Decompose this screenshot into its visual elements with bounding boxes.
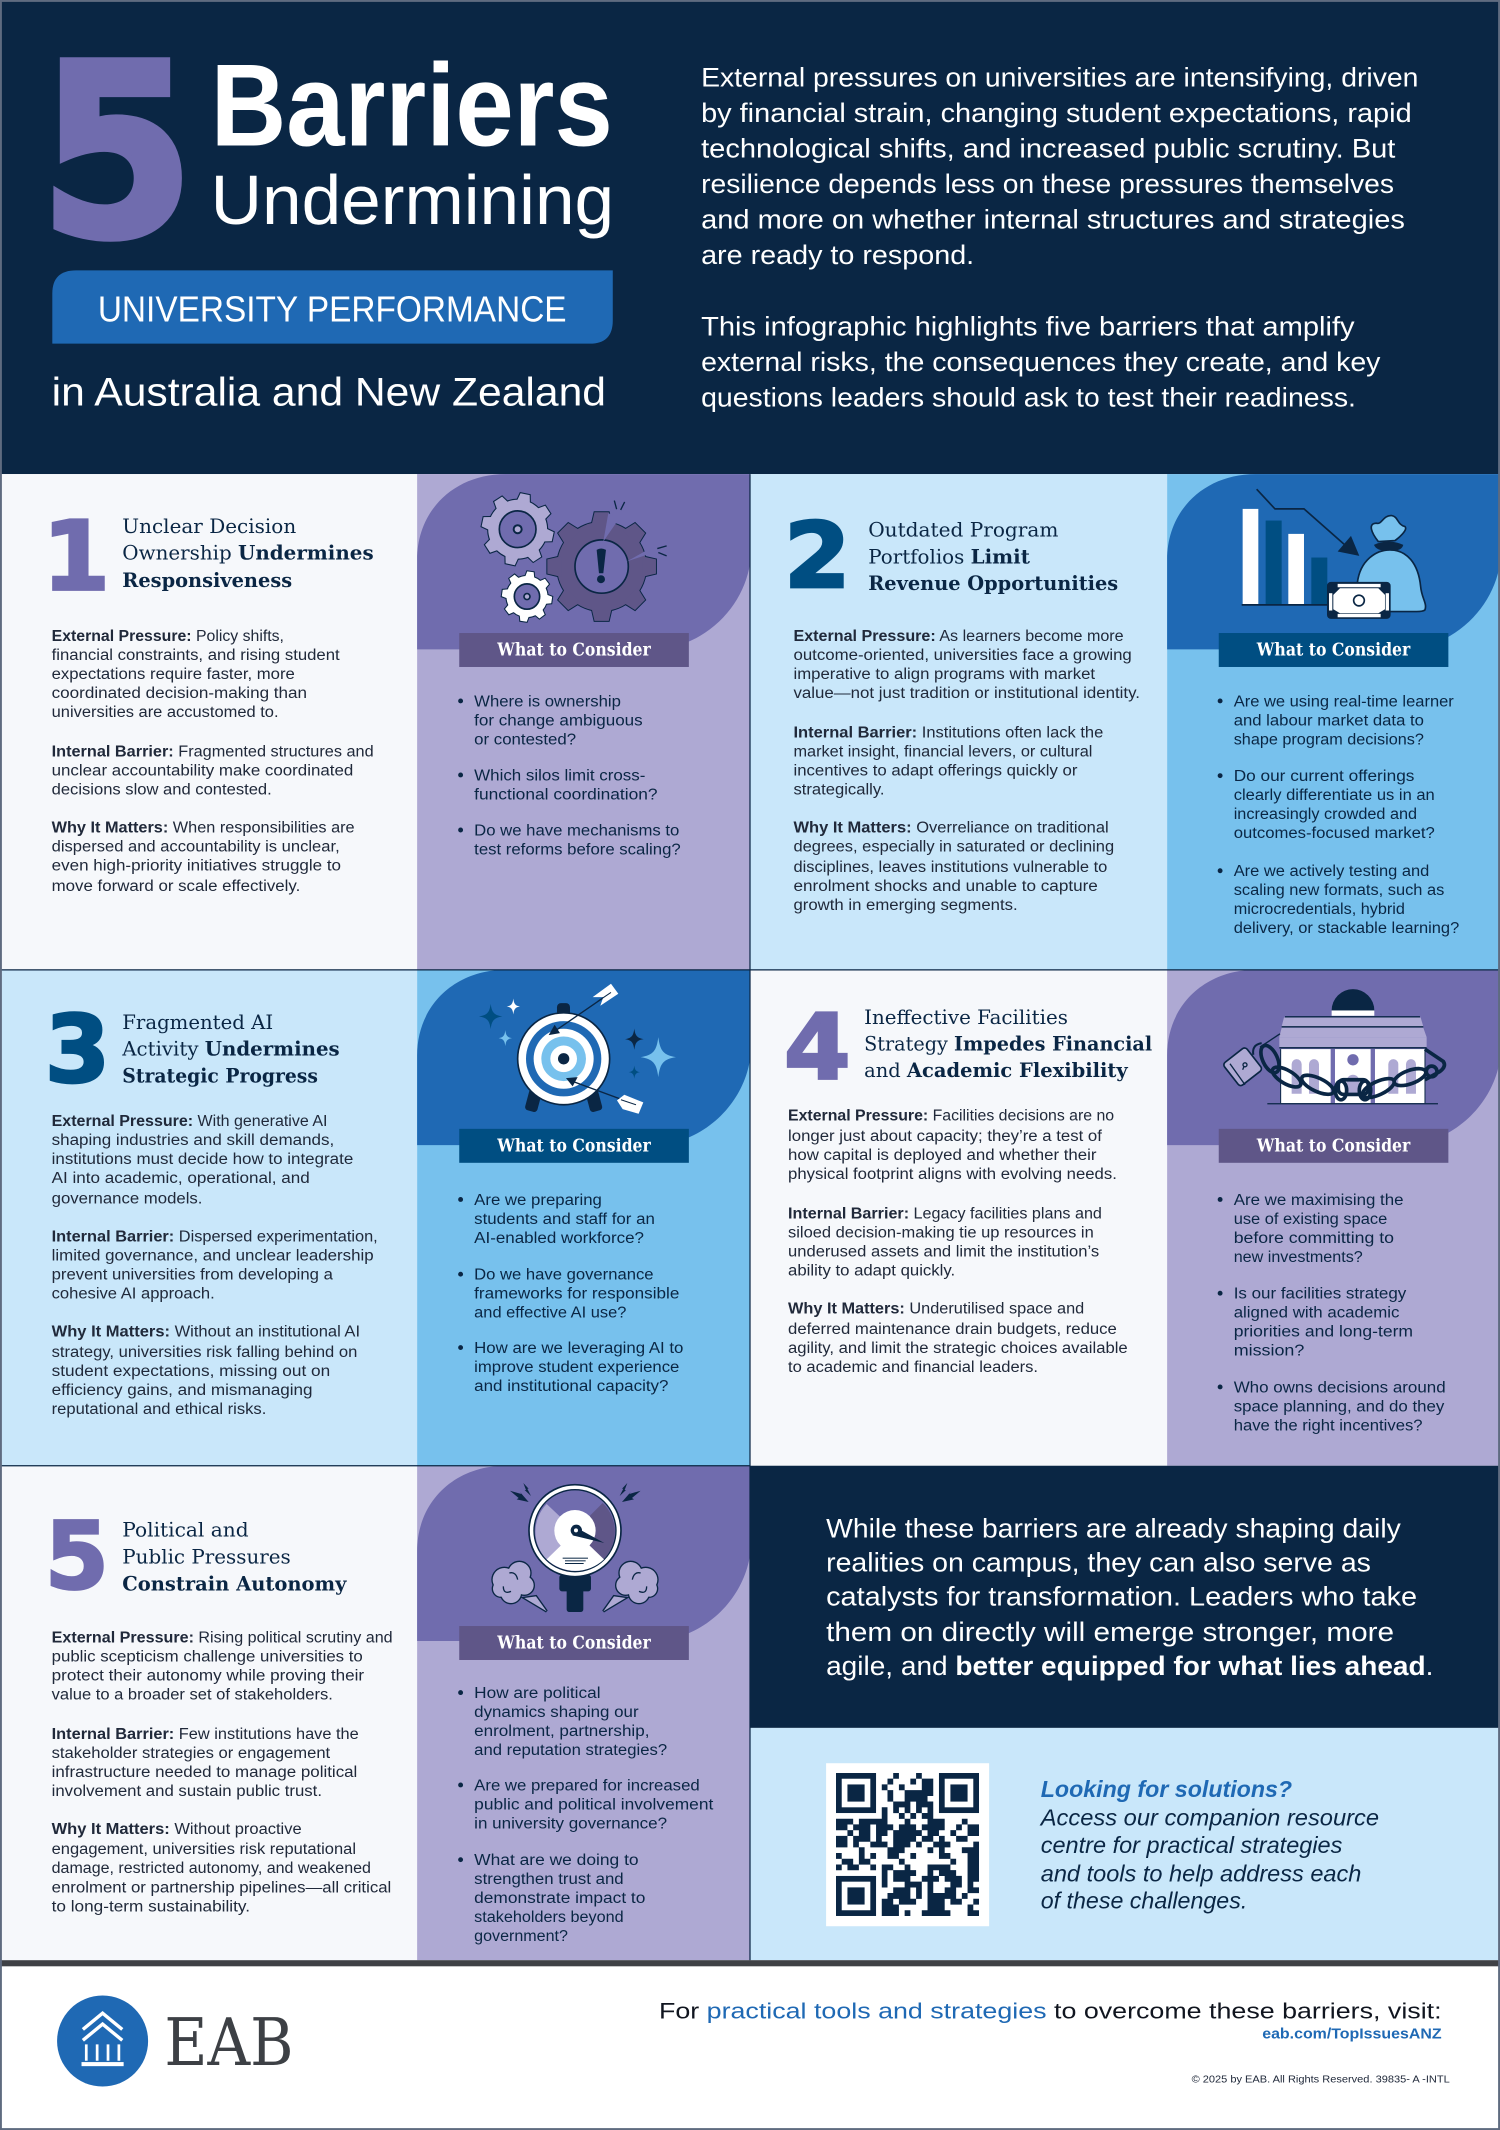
title: Undermining: Undermining — [211, 161, 614, 239]
icon: target with arrows — [479, 984, 676, 1114]
banner: university performance — [52, 270, 613, 344]
body text 5: External Pressure: Rising political scrutiny and — [52, 1628, 393, 1646]
heading 4: Ineffective Facilities — [864, 1006, 1068, 1029]
body text 4: longer just about capacity; they’re a test of — [788, 1127, 1102, 1145]
questions 5: dynamics shaping our — [474, 1703, 639, 1721]
questions 2 — [1218, 692, 1459, 937]
body text 3: cohesive AI approach. — [52, 1285, 215, 1303]
body text 3: Why It Matters: Without an institutional AI — [52, 1323, 360, 1341]
questions 4: before committing to — [1234, 1229, 1394, 1247]
big numeral 5: 5 — [39, 14, 194, 292]
heading 4: Strategy Impedes Financial — [864, 1033, 1152, 1056]
body text 1 — [52, 627, 374, 895]
body text 4: siloed decision-making tie up resources in — [788, 1224, 1094, 1242]
resource text: Access our companion resource — [1039, 1805, 1379, 1831]
intro paragraph: are ready to respond. — [701, 239, 974, 270]
title: Barriers: Barriers — [211, 39, 613, 170]
questions 5: Are we prepared for increased — [474, 1776, 700, 1794]
questions 3: Are we preparing — [474, 1191, 602, 1209]
label: what to consider — [459, 633, 689, 667]
questions 2: shape program decisions? — [1234, 730, 1424, 748]
resource panel — [750, 1728, 1500, 1960]
heading 3: Activity Undermines — [121, 1037, 340, 1060]
questions 4: Is our facilities strategy — [1234, 1285, 1406, 1303]
questions 2: microcredentials, hybrid — [1234, 900, 1405, 918]
label: what to consider: What to Consider — [496, 1135, 651, 1156]
questions 3: frameworks for responsible — [474, 1285, 679, 1303]
body text 5: to long-term sustainability. — [52, 1897, 250, 1915]
body text 2: disciplines, leaves institutions vulnerable to — [793, 858, 1107, 876]
questions 5: and reputation strategies? — [474, 1741, 667, 1759]
questions 3: AI-enabled workforce? — [474, 1229, 644, 1247]
questions 5: How are political — [474, 1684, 601, 1702]
intro paragraph: external risks, the consequences they create, and key — [701, 346, 1381, 377]
numeral 3: 3 — [45, 995, 110, 1103]
body text 5: engagement, universities risk reputational — [52, 1840, 356, 1858]
body text 5: stakeholder strategies or engagement — [52, 1744, 331, 1762]
body text 4: to academic and financial leaders. — [788, 1358, 1038, 1376]
body text 2: outcome-oriented, universities face a growing — [793, 646, 1132, 664]
body text 1: expectations require faster, more — [52, 665, 295, 683]
body text 2: incentives to adapt offerings quickly or — [793, 762, 1078, 780]
questions 5: enrolment, partnership, — [474, 1722, 649, 1740]
heading 3: Strategic Progress — [122, 1065, 318, 1088]
icon: falling bar chart and money bag — [1242, 489, 1426, 619]
body text 1: move forward or scale effectively. — [52, 877, 300, 895]
panel 3: fragmented AI activity — [0, 970, 750, 1466]
heading 2: Portfolios Limit — [868, 546, 1030, 569]
body text 1: External Pressure: Policy shifts, — [52, 627, 284, 645]
label: what to consider — [459, 1129, 689, 1163]
heading 1 — [122, 515, 374, 592]
questions 1: for change ambiguous — [474, 711, 643, 729]
questions 4: priorities and long-term — [1234, 1323, 1413, 1341]
icon: pressure gauge — [493, 1483, 657, 1612]
questions 5: strengthen trust and — [474, 1870, 624, 1888]
body text 1: even high-priority initiatives struggle to — [52, 857, 341, 875]
questions 5: What are we doing to — [474, 1851, 639, 1869]
label: what to consider — [1219, 633, 1448, 667]
numeral 4: 4 — [784, 997, 851, 1101]
questions 4: Are we maximising the — [1234, 1191, 1404, 1209]
body text 1: decisions slow and contested. — [52, 781, 272, 799]
questions 3: and institutional capacity? — [474, 1377, 669, 1395]
body text 4: underused assets and limit the institution’s — [788, 1243, 1099, 1261]
body text 2: imperative to align programs with market — [793, 665, 1096, 683]
logo: EAB — [57, 1996, 293, 2087]
intro paragraph: questions leaders should ask to test their readiness. — [701, 382, 1356, 413]
questions 4: aligned with academic — [1234, 1304, 1399, 1322]
body text 5 — [52, 1628, 393, 1915]
copyright: © 2025 by EAB. All Rights Reserved. 39835- A -INTL — [1192, 2074, 1450, 2085]
body text 1: dispersed and accountability is unclear, — [52, 838, 340, 856]
body text 2: Why It Matters: Overreliance on traditional — [793, 819, 1109, 837]
intro paragraph: technological shifts, and increased public scrutiny. But — [701, 132, 1396, 163]
body text 5: damage, restricted autonomy, and weakened — [52, 1859, 371, 1877]
intro paragraph: resilience depends less on these pressures themselves — [701, 168, 1394, 199]
body text 1: universities are accustomed to. — [52, 703, 279, 721]
body text 3: shaping industries and skill demands, — [52, 1131, 334, 1149]
body text 4: how capital is deployed and whether their — [788, 1146, 1097, 1164]
body text 3: External Pressure: With generative AI — [52, 1112, 327, 1130]
footer call to action: For practical tools and strategies to overcome these barriers, visit: — [659, 1999, 1442, 2024]
numeral 1: 1 — [42, 503, 110, 613]
body text 5: Internal Barrier: Few institutions have the — [52, 1725, 359, 1743]
body text 5: involvement and sustain public trust. — [52, 1782, 322, 1800]
body text 3: student expectations, missing out on — [52, 1362, 330, 1380]
icon: gears with warning — [475, 487, 667, 625]
questions 2: Do our current offerings — [1234, 767, 1414, 785]
body text 3: strategy, universities risk falling behind on — [52, 1343, 357, 1361]
body text 4 — [788, 1107, 1128, 1376]
body text 2: growth in emerging segments. — [793, 896, 1018, 914]
heading 5 — [122, 1518, 347, 1596]
body text 5: value to a broader set of stakeholders. — [52, 1685, 333, 1703]
questions 1: Where is ownership — [474, 692, 621, 710]
body text 2: degrees, especially in saturated or declining — [793, 838, 1114, 856]
questions 5 — [458, 1684, 714, 1945]
questions 2: scaling new formats, such as — [1234, 881, 1444, 899]
body text 1: Internal Barrier: Fragmented structures and — [52, 743, 374, 761]
questions 5: stakeholders beyond — [474, 1908, 624, 1926]
heading 1: Responsiveness — [122, 569, 292, 592]
label: what to consider — [1219, 1129, 1448, 1163]
body text 1: financial constraints, and rising student — [52, 646, 340, 664]
body text 3: institutions must decide how to integrate — [52, 1150, 353, 1168]
resource text: and tools to help address each — [1041, 1860, 1361, 1886]
conclusion panel: catalysts for transformation. Leaders who take — [826, 1581, 1417, 1612]
questions 2: clearly differentiate us in an — [1234, 786, 1435, 804]
resource text: Looking for solutions? — [1041, 1776, 1292, 1802]
panel 2: outdated program portfolios — [750, 474, 1500, 970]
subtitle: in Australia and New Zealand — [52, 370, 606, 414]
heading 4: and Academic Flexibility — [864, 1059, 1129, 1082]
header panel — [0, 0, 1500, 474]
conclusion panel: them on directly will emerge stronger, more — [826, 1616, 1394, 1647]
numeral 2: 2 — [784, 505, 851, 609]
body text 2: value—not just tradition or institutional identity. — [793, 684, 1140, 702]
heading 2 — [868, 519, 1118, 595]
banner: university performance: UNIVERSITY PERFORMANCE — [98, 288, 567, 329]
body text 2: External Pressure: As learners become more — [793, 627, 1124, 645]
questions 1: or contested? — [474, 730, 576, 748]
body text 5: protect their autonomy while proving their — [52, 1666, 365, 1684]
resource text: centre for practical strategies — [1041, 1832, 1343, 1858]
heading 3 — [121, 1011, 340, 1088]
resource text: of these challenges. — [1041, 1888, 1247, 1914]
body text 4: Internal Barrier: Legacy facilities plans and — [788, 1205, 1102, 1223]
body text 3: efficiency gains, and mismanaging — [52, 1381, 312, 1399]
heading 5: Political and — [122, 1518, 249, 1541]
body text 4: agility, and limit the strategic choices available — [788, 1339, 1128, 1357]
questions 1 — [458, 692, 681, 858]
questions 1: Do we have mechanisms to — [474, 821, 679, 839]
heading 1: Ownership Undermines — [122, 542, 374, 565]
footer call to action — [659, 1999, 1442, 2042]
body text 3: governance models. — [52, 1190, 202, 1208]
panel 1: unclear decision ownership — [0, 474, 750, 970]
panel 4: ineffective facilities strategy — [750, 970, 1500, 1466]
questions 4: new investments? — [1234, 1248, 1363, 1266]
questions 2: Are we actively testing and — [1234, 862, 1429, 880]
body text 5: public scepticism challenge universities to — [52, 1647, 363, 1665]
intro paragraph: External pressures on universities are intensifying, driven — [701, 61, 1418, 92]
questions 1: test reforms before scaling? — [474, 840, 681, 858]
questions 5: public and political involvement — [474, 1795, 714, 1813]
body text 1: Why It Matters: When responsibilities are — [52, 819, 355, 837]
questions 3: students and staff for an — [474, 1210, 655, 1228]
panel 5: political and public pressures — [0, 1466, 750, 1960]
body text 2: strategically. — [793, 781, 885, 799]
body text 2: market insight, financial levers, or cultural — [793, 743, 1092, 761]
body text 5: Why It Matters: Without proactive — [52, 1820, 302, 1838]
body text 2: enrolment shocks and unable to capture — [793, 877, 1098, 895]
label: what to consider: What to Consider — [1256, 639, 1411, 660]
questions 2: and labour market data to — [1234, 711, 1424, 729]
body text 3: reputational and ethical risks. — [52, 1400, 266, 1418]
questions 3: and effective AI use? — [474, 1304, 626, 1322]
body text 4: physical footprint aligns with evolving needs. — [788, 1165, 1117, 1183]
body text 3: AI into academic, operational, and — [52, 1169, 310, 1187]
body text 4: ability to adapt quickly. — [788, 1262, 955, 1280]
numeral 5: 5 — [45, 1502, 109, 1610]
questions 3: Do we have governance — [474, 1266, 654, 1284]
conclusion panel — [750, 1466, 1500, 1728]
questions 4: use of existing space — [1234, 1210, 1387, 1228]
questions 4 — [1218, 1191, 1446, 1434]
questions 3: improve student experience — [474, 1358, 679, 1376]
QR code — [826, 1763, 989, 1926]
heading 2: Outdated Program — [868, 519, 1058, 542]
label: what to consider: What to Consider — [496, 639, 651, 660]
questions 4: space planning, and do they — [1234, 1397, 1444, 1415]
heading 5: Constrain Autonomy — [122, 1573, 347, 1596]
questions 4: have the right incentives? — [1234, 1416, 1423, 1434]
label: what to consider: What to Consider — [1256, 1135, 1411, 1156]
questions 1: Which silos limit cross- — [474, 766, 645, 784]
label: what to consider: What to Consider — [496, 1632, 651, 1653]
body text 3 — [52, 1112, 378, 1418]
questions 2: increasingly crowded and — [1234, 805, 1417, 823]
questions 5: government? — [474, 1927, 568, 1945]
conclusion panel: While these barriers are already shaping daily — [826, 1513, 1401, 1544]
body text 4: deferred maintenance drain budgets, reduce — [788, 1320, 1117, 1338]
body text 4: External Pressure: Facilities decisions are no — [788, 1107, 1114, 1125]
heading 4 — [864, 1006, 1152, 1082]
footer — [0, 1960, 1500, 2087]
questions 3 — [458, 1191, 684, 1395]
intro paragraph: by financial strain, changing student expectations, rapid — [701, 97, 1412, 128]
resource text — [1039, 1776, 1379, 1914]
body text 5: infrastructure needed to manage political — [52, 1763, 357, 1781]
questions 5: demonstrate impact to — [474, 1889, 645, 1907]
body text 3: limited governance, and unclear leadership — [52, 1247, 374, 1265]
label: what to consider — [459, 1626, 689, 1660]
body text 5: enrolment or partnership pipelines—all critical — [52, 1878, 391, 1896]
intro paragraph — [701, 61, 1418, 413]
footer call to action: eab.com/TopIssuesANZ — [1262, 2026, 1442, 2042]
questions 2: Are we using real-time learner — [1234, 692, 1454, 710]
heading 5: Public Pressures — [122, 1546, 291, 1569]
heading 1: Unclear Decision — [122, 515, 296, 538]
questions 4: mission? — [1234, 1342, 1304, 1360]
questions 1: functional coordination? — [474, 785, 658, 803]
icon: chained building — [1223, 989, 1444, 1104]
questions 5: in university governance? — [474, 1814, 667, 1832]
intro paragraph: and more on whether internal structures and strategies — [701, 204, 1405, 235]
logo: EAB: EAB — [164, 2005, 293, 2081]
body text 2 — [793, 627, 1140, 914]
intro paragraph: This infographic highlights five barriers that amplify — [701, 310, 1355, 341]
body text 3: prevent universities from developing a — [52, 1266, 333, 1284]
questions 2: delivery, or stackable learning? — [1234, 919, 1459, 937]
questions 3: How are we leveraging AI to — [474, 1339, 684, 1357]
conclusion panel: realities on campus, they can also serve as — [826, 1547, 1371, 1578]
conclusion panel: agile, and better equipped for what lies ahead . — [826, 1650, 1433, 1681]
body text 3: Internal Barrier: Dispersed experimentation, — [52, 1228, 378, 1246]
heading 2: Revenue Opportunities — [868, 572, 1118, 595]
body text 1: unclear accountability make coordinated — [52, 762, 353, 780]
body text 2: Internal Barrier: Institutions often lack the — [793, 724, 1103, 742]
questions 2: outcomes-focused market? — [1234, 824, 1435, 842]
body text 4: Why It Matters: Underutilised space and — [788, 1300, 1084, 1318]
heading 3: Fragmented AI — [122, 1011, 273, 1034]
questions 4: Who owns decisions around — [1234, 1378, 1446, 1396]
body text 1: coordinated decision-making than — [52, 684, 307, 702]
